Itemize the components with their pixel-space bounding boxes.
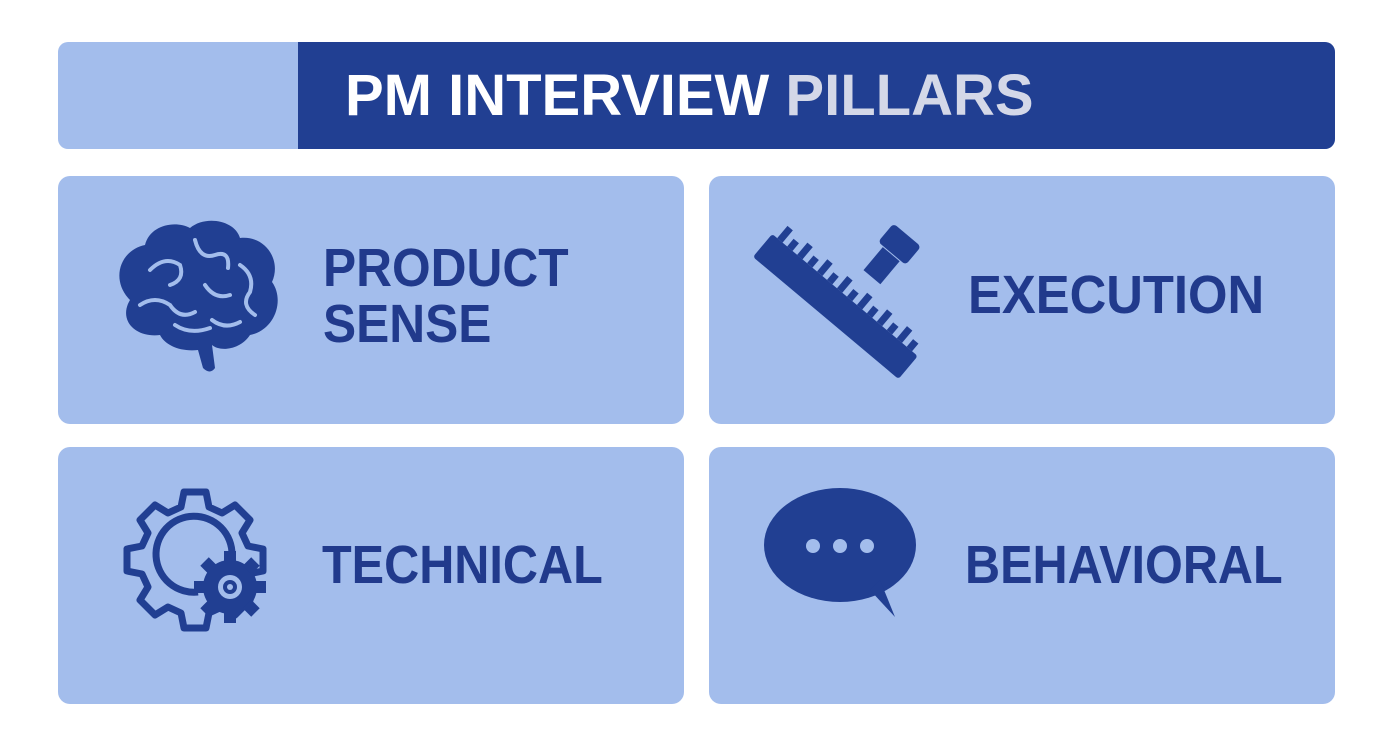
label: product sense: SENSE [323, 294, 491, 354]
label: product sense [323, 238, 569, 354]
title bar [58, 42, 1335, 149]
panel: technical [58, 447, 684, 704]
icon: speech bubble [764, 488, 916, 617]
icon: ruler and bolt [753, 222, 928, 379]
label: behavioral: BEHAVIORAL [965, 535, 1283, 595]
panel: product sense [58, 176, 684, 424]
panel: execution [709, 176, 1335, 424]
icon: gears [127, 492, 266, 628]
icon: brain [119, 221, 278, 372]
title: PM INTERVIEW PILLARS [345, 63, 1034, 128]
label: product sense: PRODUCT [323, 238, 569, 298]
panel: behavioral [709, 447, 1335, 704]
label: execution: EXECUTION [968, 265, 1264, 325]
label: technical: TECHNICAL [322, 535, 603, 595]
